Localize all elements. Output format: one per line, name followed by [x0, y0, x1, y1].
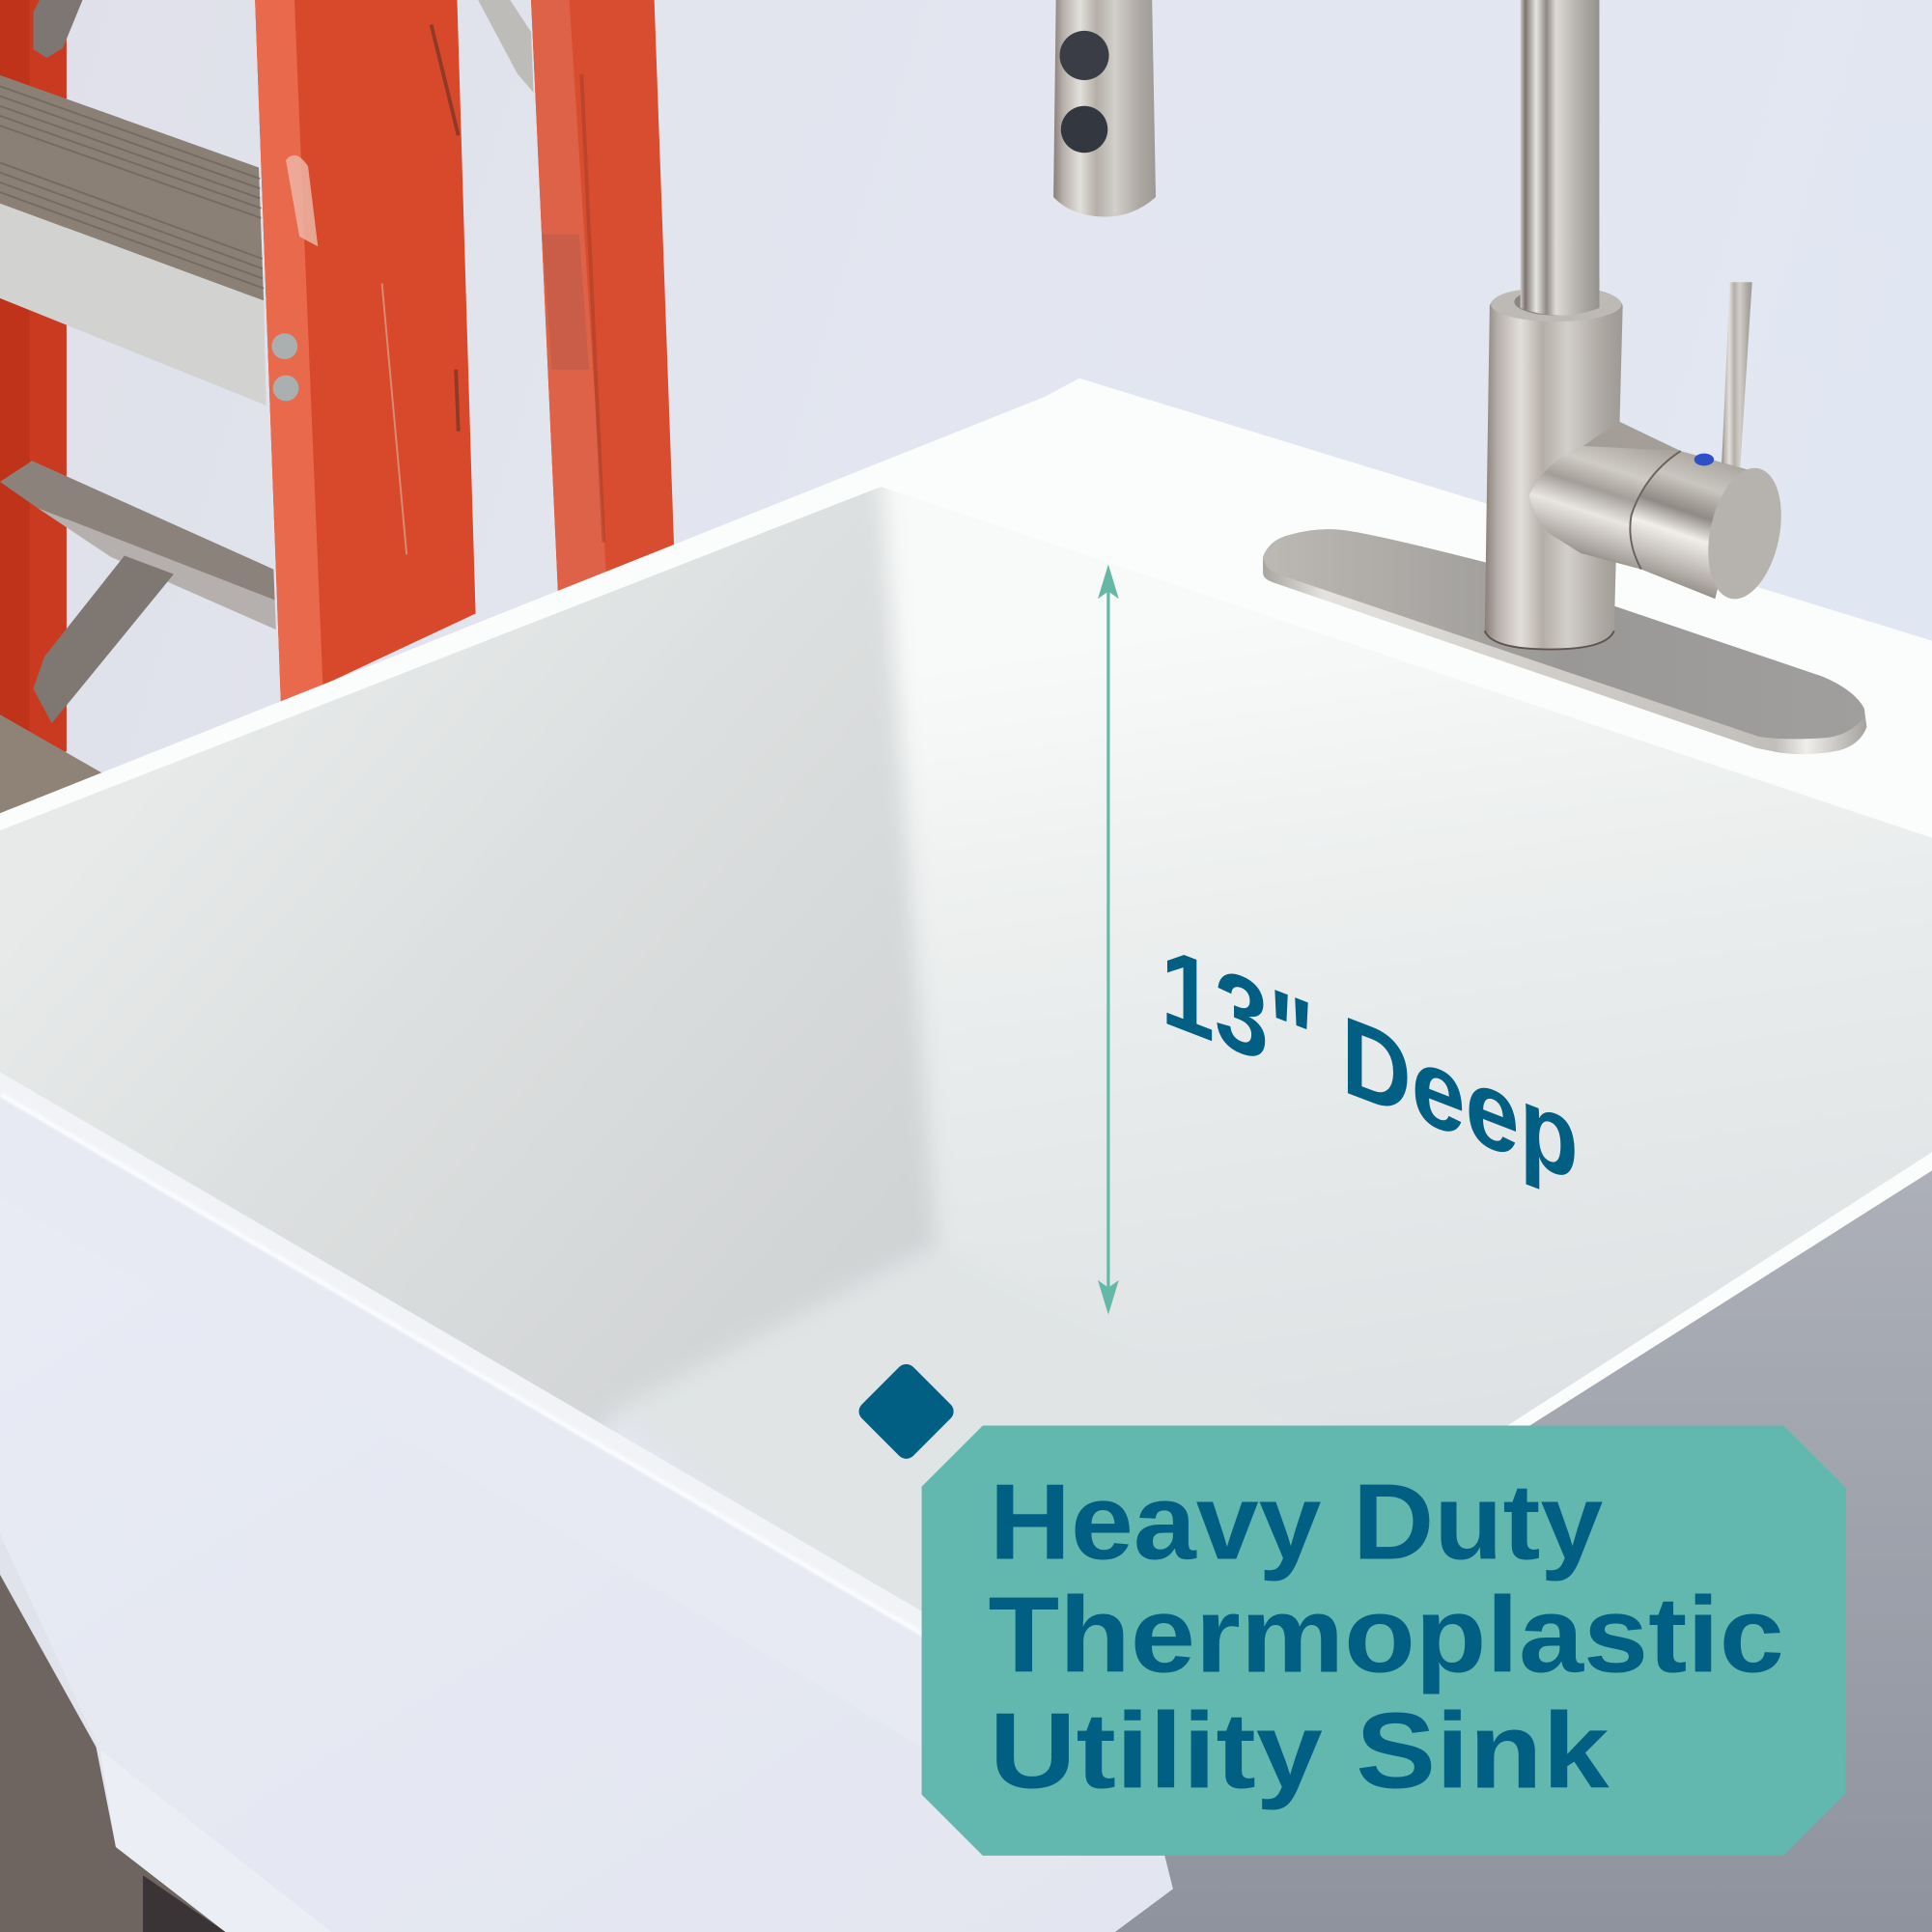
handle end face	[1697, 462, 1792, 605]
ladder bottom tread	[0, 714, 103, 818]
floor	[0, 1575, 226, 1932]
faucet sprayer head	[1053, 0, 1156, 217]
handle cap	[1630, 451, 1748, 599]
basin floor	[630, 1253, 1287, 1610]
depth label: 13" Deep	[1161, 923, 1579, 1206]
handle arm	[1529, 446, 1681, 570]
ladder far left rail	[0, 0, 67, 751]
callout: heavy duty thermoplastic utility sink	[923, 1427, 1844, 1855]
sprayer button top	[1059, 31, 1109, 80]
plate edge	[1263, 529, 1866, 754]
plate top face	[1263, 529, 1864, 739]
callout line 1: Heavy Duty	[990, 1461, 1604, 1582]
ladder upper brace	[478, 0, 534, 93]
basin interior	[0, 456, 1932, 1651]
faucet base cylinder	[1485, 278, 1623, 650]
ladder lower rung and strut	[0, 461, 276, 723]
depth arrow	[1098, 564, 1119, 1315]
ladder second rail	[531, 0, 674, 597]
ladder rivets	[271, 333, 298, 401]
faucet deck plate	[1263, 529, 1866, 754]
sink white inner edge right	[1505, 1152, 1932, 1427]
sink top deck	[0, 378, 1932, 862]
basin blurred surfaces	[0, 456, 1932, 1651]
ladder upper bracket	[33, 0, 83, 58]
ladder	[0, 0, 674, 818]
sink front face	[0, 1197, 1173, 1932]
faucet spout tube	[1521, 0, 1599, 318]
handle neck	[1583, 421, 1681, 468]
sink exterior right side	[1097, 1152, 1932, 1932]
sink leg	[99, 1750, 331, 1932]
ladder top tread	[0, 75, 266, 406]
handle collar seam	[1630, 451, 1681, 570]
basin right wall	[880, 499, 1932, 1425]
sink foot shadow	[143, 1875, 226, 1932]
ladder main rail	[255, 0, 476, 705]
diamond marker	[854, 1360, 958, 1463]
sprayer button bottom	[1061, 106, 1107, 153]
handle temperature dot	[1694, 454, 1714, 465]
faucet handle rod	[1722, 282, 1752, 473]
callout line 2: Thermoplastic	[988, 1575, 1784, 1695]
sink front rim	[0, 1072, 927, 1750]
basin left wall	[0, 456, 937, 1467]
callout line 3: Utility Sink	[990, 1691, 1610, 1811]
faucet handle body	[1529, 421, 1792, 605]
